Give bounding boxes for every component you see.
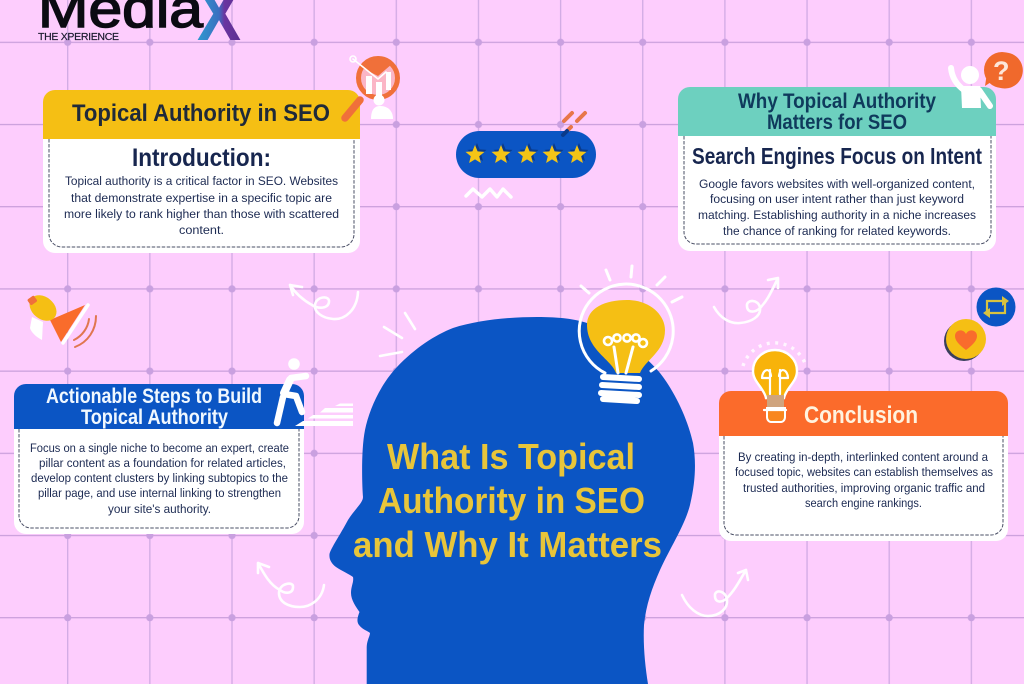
body text: focusing on user intent rather than just keyword	[710, 192, 964, 206]
rating pill with five stars	[456, 131, 596, 178]
body text: trusted authorities, improving organic traffic and	[743, 481, 985, 495]
icon: heart badge	[944, 319, 986, 361]
heading	[46, 385, 262, 429]
icon: megaphone	[24, 290, 96, 347]
header bar yellow	[43, 90, 360, 139]
body text: pillar page, and use internal linking to strengthen	[38, 486, 281, 500]
heading: Topical Authority	[81, 406, 228, 429]
icon: big light bulb	[579, 266, 682, 401]
body text	[30, 441, 289, 516]
sparkle dashes above rating	[563, 113, 585, 135]
header bar orange	[719, 391, 1008, 436]
arrow: curl pointing up-right, bottom	[682, 570, 748, 616]
body text	[735, 450, 993, 510]
central head silhouette	[329, 317, 695, 684]
icon: small light bulb	[743, 343, 806, 422]
main title: Authority in SEO	[378, 480, 645, 521]
stars	[466, 145, 586, 163]
heading: Matters for SEO	[767, 110, 907, 134]
body text: search engine rankings.	[805, 496, 922, 510]
main title: What Is Topical	[387, 436, 635, 477]
arrow: curl pointing up-left, top	[290, 285, 358, 319]
main title	[353, 436, 662, 565]
body text: matching. Establishing authority in a niche increases	[698, 208, 976, 222]
icon: magnifier with chart and person	[345, 56, 398, 119]
rays beside head	[380, 313, 415, 356]
body text	[64, 174, 339, 237]
body text: that demonstrate expertise in a specific topic are	[71, 191, 332, 205]
panel: conclusion	[719, 391, 1008, 541]
body text: the chance of ranking for related keywords.	[723, 224, 951, 238]
body text: Google favors websites with well-organized content,	[699, 177, 975, 191]
icon: person with question bubble: ?	[993, 56, 1010, 86]
panel: actionable steps	[14, 384, 304, 534]
body text: By creating in-depth, interlinked content around a	[738, 450, 988, 464]
icon: person with question bubble	[951, 52, 1023, 108]
body text	[698, 177, 976, 238]
main title: and Why It Matters	[353, 524, 662, 565]
header bar blue	[14, 384, 304, 429]
logo: MediaX	[38, 0, 241, 56]
icon: repeat badge	[976, 288, 1016, 326]
subheading: Introduction:	[132, 144, 271, 172]
heading	[738, 89, 936, 134]
heading: Conclusion	[804, 402, 918, 429]
star shadows	[468, 143, 588, 161]
body text: Topical authority is a critical factor in SEO. Websites	[65, 174, 338, 188]
body text: focused topic, websites can establish themselves as	[735, 465, 993, 479]
arrow: curl pointing up-left, bottom	[258, 563, 324, 607]
heading: Topical Authority in SEO	[72, 100, 330, 127]
heading: Actionable Steps to Build	[46, 385, 262, 408]
body text: more likely to rank higher than those with scattered	[64, 207, 339, 221]
panel: why topical authority matters	[678, 87, 996, 251]
arrow: curl pointing up-right, top	[714, 278, 778, 323]
body text: pillar content as a foundation for related articles,	[39, 456, 286, 470]
zigzag below rating	[466, 189, 511, 197]
body text: content.	[179, 223, 224, 237]
body text: Focus on a single niche to become an expert, create	[30, 441, 289, 455]
body text: your site's authority.	[108, 502, 211, 516]
heading: Why Topical Authority	[738, 89, 936, 113]
header bar teal	[678, 87, 996, 136]
panel: topical authority introduction	[43, 90, 360, 253]
icon: runner on steps	[277, 358, 353, 426]
logo: MediaX: THE XPERIENCE	[38, 31, 119, 43]
body text: develop content clusters by linking subtopics to the	[31, 471, 288, 485]
